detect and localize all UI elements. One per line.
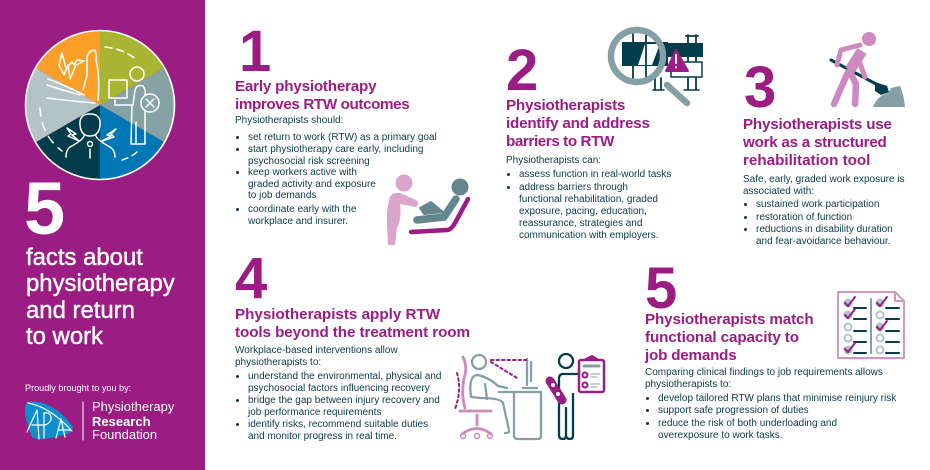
number 4: 4 <box>235 246 267 311</box>
heading 2 <box>506 97 650 150</box>
text block 3: sustained work participation <box>756 199 879 210</box>
text block 4: and monitor progress in real time. <box>248 431 397 442</box>
text block 4: Workplace-based interventions allow <box>235 345 398 356</box>
text block 1: Physiotherapists should: <box>235 115 343 126</box>
heading 5 <box>644 311 813 364</box>
text block 1: keep workers active with <box>248 167 357 178</box>
panel 1: early physiotherapy <box>235 19 437 227</box>
foundation name: Physiotherapy <box>92 399 174 414</box>
heading 2: barriers to RTW <box>506 133 614 150</box>
heading 3: rehabilitation tool <box>743 152 870 169</box>
heading 4: tools beyond the treatment room <box>235 324 470 341</box>
divider <box>82 402 84 440</box>
heading 3: work as a structured <box>743 134 887 151</box>
text block 2: exposure, pacing, education, <box>519 206 647 217</box>
text block 3 <box>743 174 905 247</box>
heading 5: job demands <box>645 347 736 364</box>
text block 2: reassurance, strategies and <box>519 218 642 229</box>
text block 1: psychosocial risk screening <box>248 156 370 167</box>
text block 3: and fear-avoidance behaviour. <box>756 236 891 247</box>
text block 5: develop tailored RTW plans that minimise reinjury risk <box>658 393 896 404</box>
text block 1: workplace and insurer. <box>248 216 348 227</box>
panel 2: identify barriers <box>506 38 671 241</box>
sidebar title: to work <box>26 323 103 350</box>
text block 1: coordinate early with the <box>248 204 356 215</box>
sidebar title: and return <box>26 297 135 324</box>
heading 1 <box>235 78 410 113</box>
panel 5: functional capacity <box>644 256 896 441</box>
heading 3: Physiotherapists use <box>743 116 892 133</box>
text block 2: assess function in real-world tasks <box>519 169 671 180</box>
text block 4: bridge the gap between injury recovery and <box>248 395 440 406</box>
number 3: 3 <box>744 55 776 120</box>
text block 2: communication with employers. <box>519 230 658 241</box>
foundation name: Research <box>92 414 151 429</box>
heading 4 <box>235 306 470 341</box>
credit line: Proudly brought to you by: <box>25 383 131 393</box>
number 2: 2 <box>506 38 538 103</box>
heading 2: Physiotherapists <box>506 97 625 114</box>
text block 1: graded activity and exposure <box>248 179 376 190</box>
text block 3: restoration of function <box>756 212 852 223</box>
panel 4: tools beyond treatment room <box>235 246 470 442</box>
icon: six-segment wheel <box>26 30 174 180</box>
heading 3 <box>743 116 892 169</box>
text block 1: to job demands <box>248 190 316 201</box>
panel: left sidebar <box>0 0 205 470</box>
text block 2: address barriers through <box>519 182 628 193</box>
heading 1: Early physiotherapy <box>235 78 376 95</box>
number 5: 5 <box>645 256 677 321</box>
foundation name: Foundation <box>92 427 157 442</box>
icon: therapist treating patient <box>387 174 468 245</box>
text block 4: physiotherapists to: <box>235 357 321 368</box>
text block 5 <box>645 367 896 441</box>
heading 2: identify and address <box>506 115 650 132</box>
text block 2 <box>506 155 671 241</box>
text block 5: overexposure to work tasks. <box>658 430 782 441</box>
text block 4: understand the environmental, physical and <box>248 371 441 382</box>
heading 4: Physiotherapists apply RTW <box>235 306 440 323</box>
text block 3: Safe, early, graded work exposure is <box>743 174 905 185</box>
icon: magnifier over barrier <box>611 30 703 103</box>
panel 3: work as rehabilitation <box>743 55 905 247</box>
text block 4 <box>235 345 441 442</box>
text block 1: set return to work (RTW) as a primary goal <box>248 132 437 143</box>
sidebar title: physiotherapy <box>26 270 175 297</box>
sidebar title: facts about <box>26 244 143 271</box>
text block 4: psychosocial factors influencing recovery <box>248 383 430 394</box>
text block 1: start physiotherapy care early, including <box>248 144 423 155</box>
text block 3: reductions in disability duration <box>756 224 893 235</box>
text block 1 <box>235 115 437 227</box>
heading 5: Physiotherapists match <box>645 311 813 328</box>
foundation name <box>92 399 174 442</box>
sidebar big number: 5 <box>24 167 65 250</box>
number 1: 1 <box>239 19 271 84</box>
text block 2: Physiotherapists can: <box>506 155 601 166</box>
text block 5: Comparing clinical findings to job requirements allows <box>645 367 883 378</box>
heading 5: functional capacity to <box>645 329 799 346</box>
text block 4: job performance requirements <box>248 407 381 418</box>
icon: desk worker and assessor <box>455 354 604 439</box>
icon: APA logo <box>25 402 73 439</box>
icon: checklist document <box>838 292 904 358</box>
heading 1: improves RTW outcomes <box>235 96 409 113</box>
text block 5: support safe progression of duties <box>658 405 809 416</box>
text block 5: physiotherapists to: <box>645 379 731 390</box>
text block 5: reduce the risk of both underloading and <box>658 418 837 429</box>
sidebar title <box>26 244 175 350</box>
text block 2: functional rehabilitation, graded <box>519 194 658 205</box>
text block 3: associated with: <box>743 186 814 197</box>
text block 4: identify risks, recommend suitable duties <box>248 419 428 430</box>
icon: worker with shovel <box>831 32 905 107</box>
